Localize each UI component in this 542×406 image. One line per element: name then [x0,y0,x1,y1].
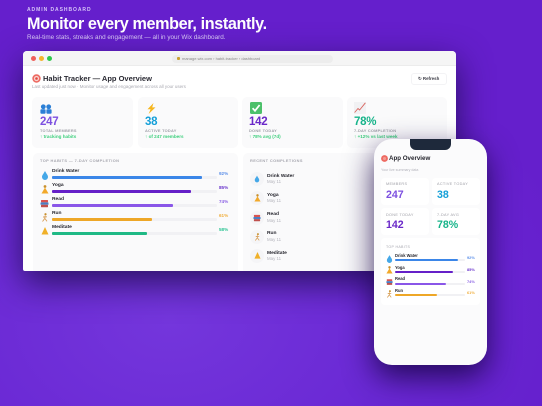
habit row: meditate: Meditate [52,224,72,230]
habit row: run: 61% [219,212,228,218]
url bar: manage.wix.com › habit-tracker › dashboard [182,56,260,60]
phone habit: run [387,288,475,298]
icon: lightning [148,103,156,114]
dashboard heading [32,74,186,89]
phone habit: drink water: Drink Water [395,253,418,258]
phone stat: 7-day avg: 7-DAY AVG [437,212,459,216]
notch [410,139,451,150]
subtitle: Real-time stats, streaks and engagement — all in your Wix dashboard. [27,34,226,41]
habit row: run [42,210,228,222]
phone stat: 7-day avg: 78% [437,219,458,231]
habit row: drink water [42,168,228,180]
habit row: drink water: 92% [219,170,228,176]
habit row: meditate [42,224,228,235]
trend: ↑ +12% vs last week [354,134,398,139]
label: 7-DAY COMPLETION [354,128,396,133]
header [27,7,267,41]
completion: meditate: Meditate [267,251,287,256]
panel: top habits [33,153,238,278]
phone habit: read [386,276,475,285]
habit row: yoga: 85% [219,184,228,190]
phone stat: members: MEMBERS [386,182,407,186]
completion: drink water: May 11 [267,179,281,184]
completion: run [255,231,281,242]
browser toolbar [23,51,456,66]
stat card: done today [242,97,343,148]
habit row: yoga: Yoga [52,182,64,188]
phone habit: drink water: 92% [467,255,475,260]
completion: yoga: May 11 [267,198,281,203]
phone habit: yoga: Yoga [395,265,405,270]
phone habit: run: Run [395,288,403,293]
completion: read: May 11 [267,218,281,223]
label: ACTIVE TODAY [145,128,177,133]
refresh button [411,73,447,85]
habit row: read: 74% [219,198,228,204]
stat card: 7-day completion [347,97,447,148]
completion: meditate [254,250,287,261]
habit row: meditate: 58% [219,226,228,232]
completion: drink water: Drink Water [267,174,294,178]
phone habit: yoga: 85% [467,267,475,272]
value: 142 [249,116,267,128]
completion: run: Run [267,231,277,236]
label: TOTAL MEMBERS [40,128,77,133]
stat card: total members [32,97,133,148]
icon: people [40,104,52,114]
panel heading: TOP HABITS — 7-DAY COMPLETION [40,158,119,163]
phone title: App Overview [389,154,430,162]
browser window [23,51,456,271]
habit row: read [40,196,228,208]
title: Monitor every member, instantly. [27,15,267,33]
trend: ↑ 78% avg (7d) [249,134,281,139]
phone stat: done today: DONE TODAY [386,212,414,216]
completion: drink water [254,174,294,184]
stat card: active today [138,97,238,148]
icon: target [32,74,41,83]
phone panel: top habits [381,238,480,305]
phone stat: active today [432,178,480,205]
phone stat: members: 247 [386,188,404,200]
completion: yoga [254,193,281,203]
phone panel heading: TOP HABITS [386,244,410,248]
phone subtitle: Your live summary data [381,168,418,172]
icon: trend chart [354,102,366,114]
trend: ↑ tracking habits [40,134,76,139]
habit row: read: Read [52,196,64,202]
habit row: run: Run [52,210,62,216]
phone habit: read: Read [395,276,405,281]
phone stat: members [381,178,429,205]
icon: target [381,155,388,162]
icon: check [250,102,262,114]
window buttons [31,56,52,61]
phone stat: done today [381,208,429,235]
value: 38 [145,116,157,128]
panel: recent completions [243,153,447,278]
last updated: Last updated just now · Monitor usage and engagement across all your users [32,84,186,89]
phone habit: run: 61% [467,290,475,295]
label: DONE TODAY [249,128,277,133]
phone stat: active today: ACTIVE TODAY [437,182,468,186]
refresh button: ↻ Refresh [418,76,439,81]
value: 247 [40,116,58,128]
phone habit: drink water [386,253,475,263]
habit row: drink water: Drink Water [52,168,79,174]
habit row: yoga [42,182,228,194]
phone heading [381,154,430,172]
phone stat: 7-day avg [432,208,480,235]
heading text: Habit Tracker — App Overview [43,74,152,82]
trend: ↑ of 247 members [145,134,184,139]
completion: read: Read [267,212,279,217]
completion: yoga: Yoga [267,193,279,198]
phone habit: yoga [386,265,475,274]
phone [374,139,487,365]
url bar [172,54,333,62]
panel heading: RECENT COMPLETIONS [250,158,303,163]
value: 78% [354,116,376,128]
completion: read [253,212,281,223]
phone stat: done today: 142 [386,219,404,231]
eyebrow: ADMIN DASHBOARD [27,7,92,13]
phone habit: read: 74% [467,278,475,284]
phone stat: active today: 38 [437,188,449,200]
completion: run: May 11 [267,237,281,242]
completion: meditate: May 11 [267,256,281,261]
